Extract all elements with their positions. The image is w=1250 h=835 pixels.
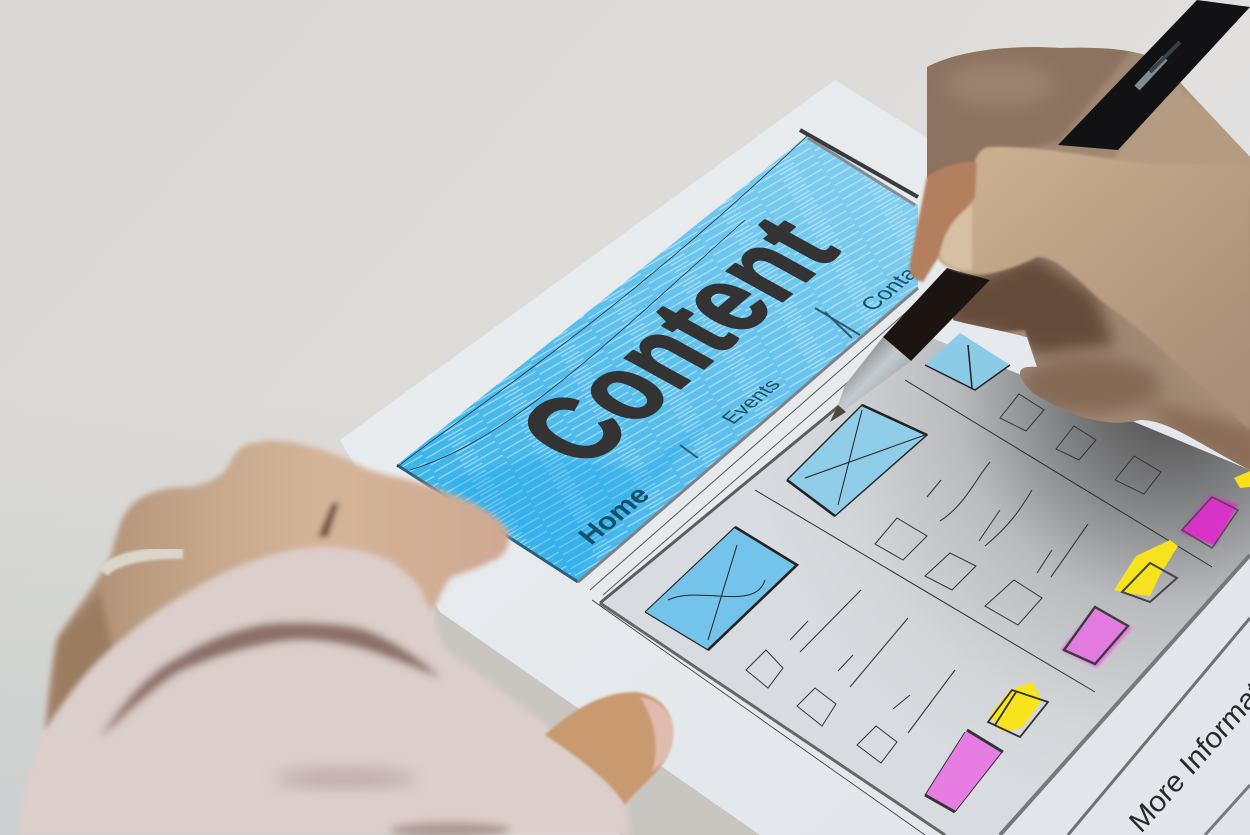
button: yellow lower bbox=[988, 682, 1048, 737]
wireframe grey page bbox=[592, 335, 1250, 835]
lower right column with More Information bbox=[1068, 618, 1250, 835]
sleeve bbox=[18, 547, 630, 835]
left thumb bbox=[545, 692, 673, 805]
blue header banner bbox=[397, 130, 925, 595]
button: pink upper bbox=[1060, 607, 1132, 668]
button: yellow upper bbox=[1114, 540, 1178, 602]
row divider lines bbox=[755, 380, 1212, 692]
right hand: thumb and index finger bbox=[910, 147, 1250, 430]
ring bbox=[103, 553, 183, 572]
sketched text lines bbox=[790, 462, 1088, 733]
pen: metal tip bbox=[830, 337, 911, 422]
button: magenta bbox=[1180, 495, 1238, 548]
button: pink lower bbox=[925, 730, 1003, 812]
nav label: Contact: Contact bbox=[854, 252, 937, 314]
pen: lower barrel bbox=[883, 268, 990, 361]
heading: Content: Content bbox=[491, 199, 865, 483]
shadowed under-sheet below paper bbox=[430, 605, 770, 835]
sketched small squares bbox=[746, 394, 1161, 763]
nav label: Home: Home bbox=[570, 483, 658, 548]
left hand bbox=[45, 441, 509, 735]
image placeholder: lower bbox=[645, 527, 797, 650]
yellow tag at right edge bbox=[1234, 471, 1250, 488]
white paper sheet bbox=[340, 80, 1250, 835]
right hand: palm and lower fingers bbox=[927, 47, 1250, 470]
nav label: Events: Events bbox=[717, 376, 786, 427]
image placeholder: middle bbox=[787, 405, 927, 516]
pen: upper barrel bbox=[1058, 0, 1250, 150]
image placeholder: top bbox=[925, 333, 1010, 390]
